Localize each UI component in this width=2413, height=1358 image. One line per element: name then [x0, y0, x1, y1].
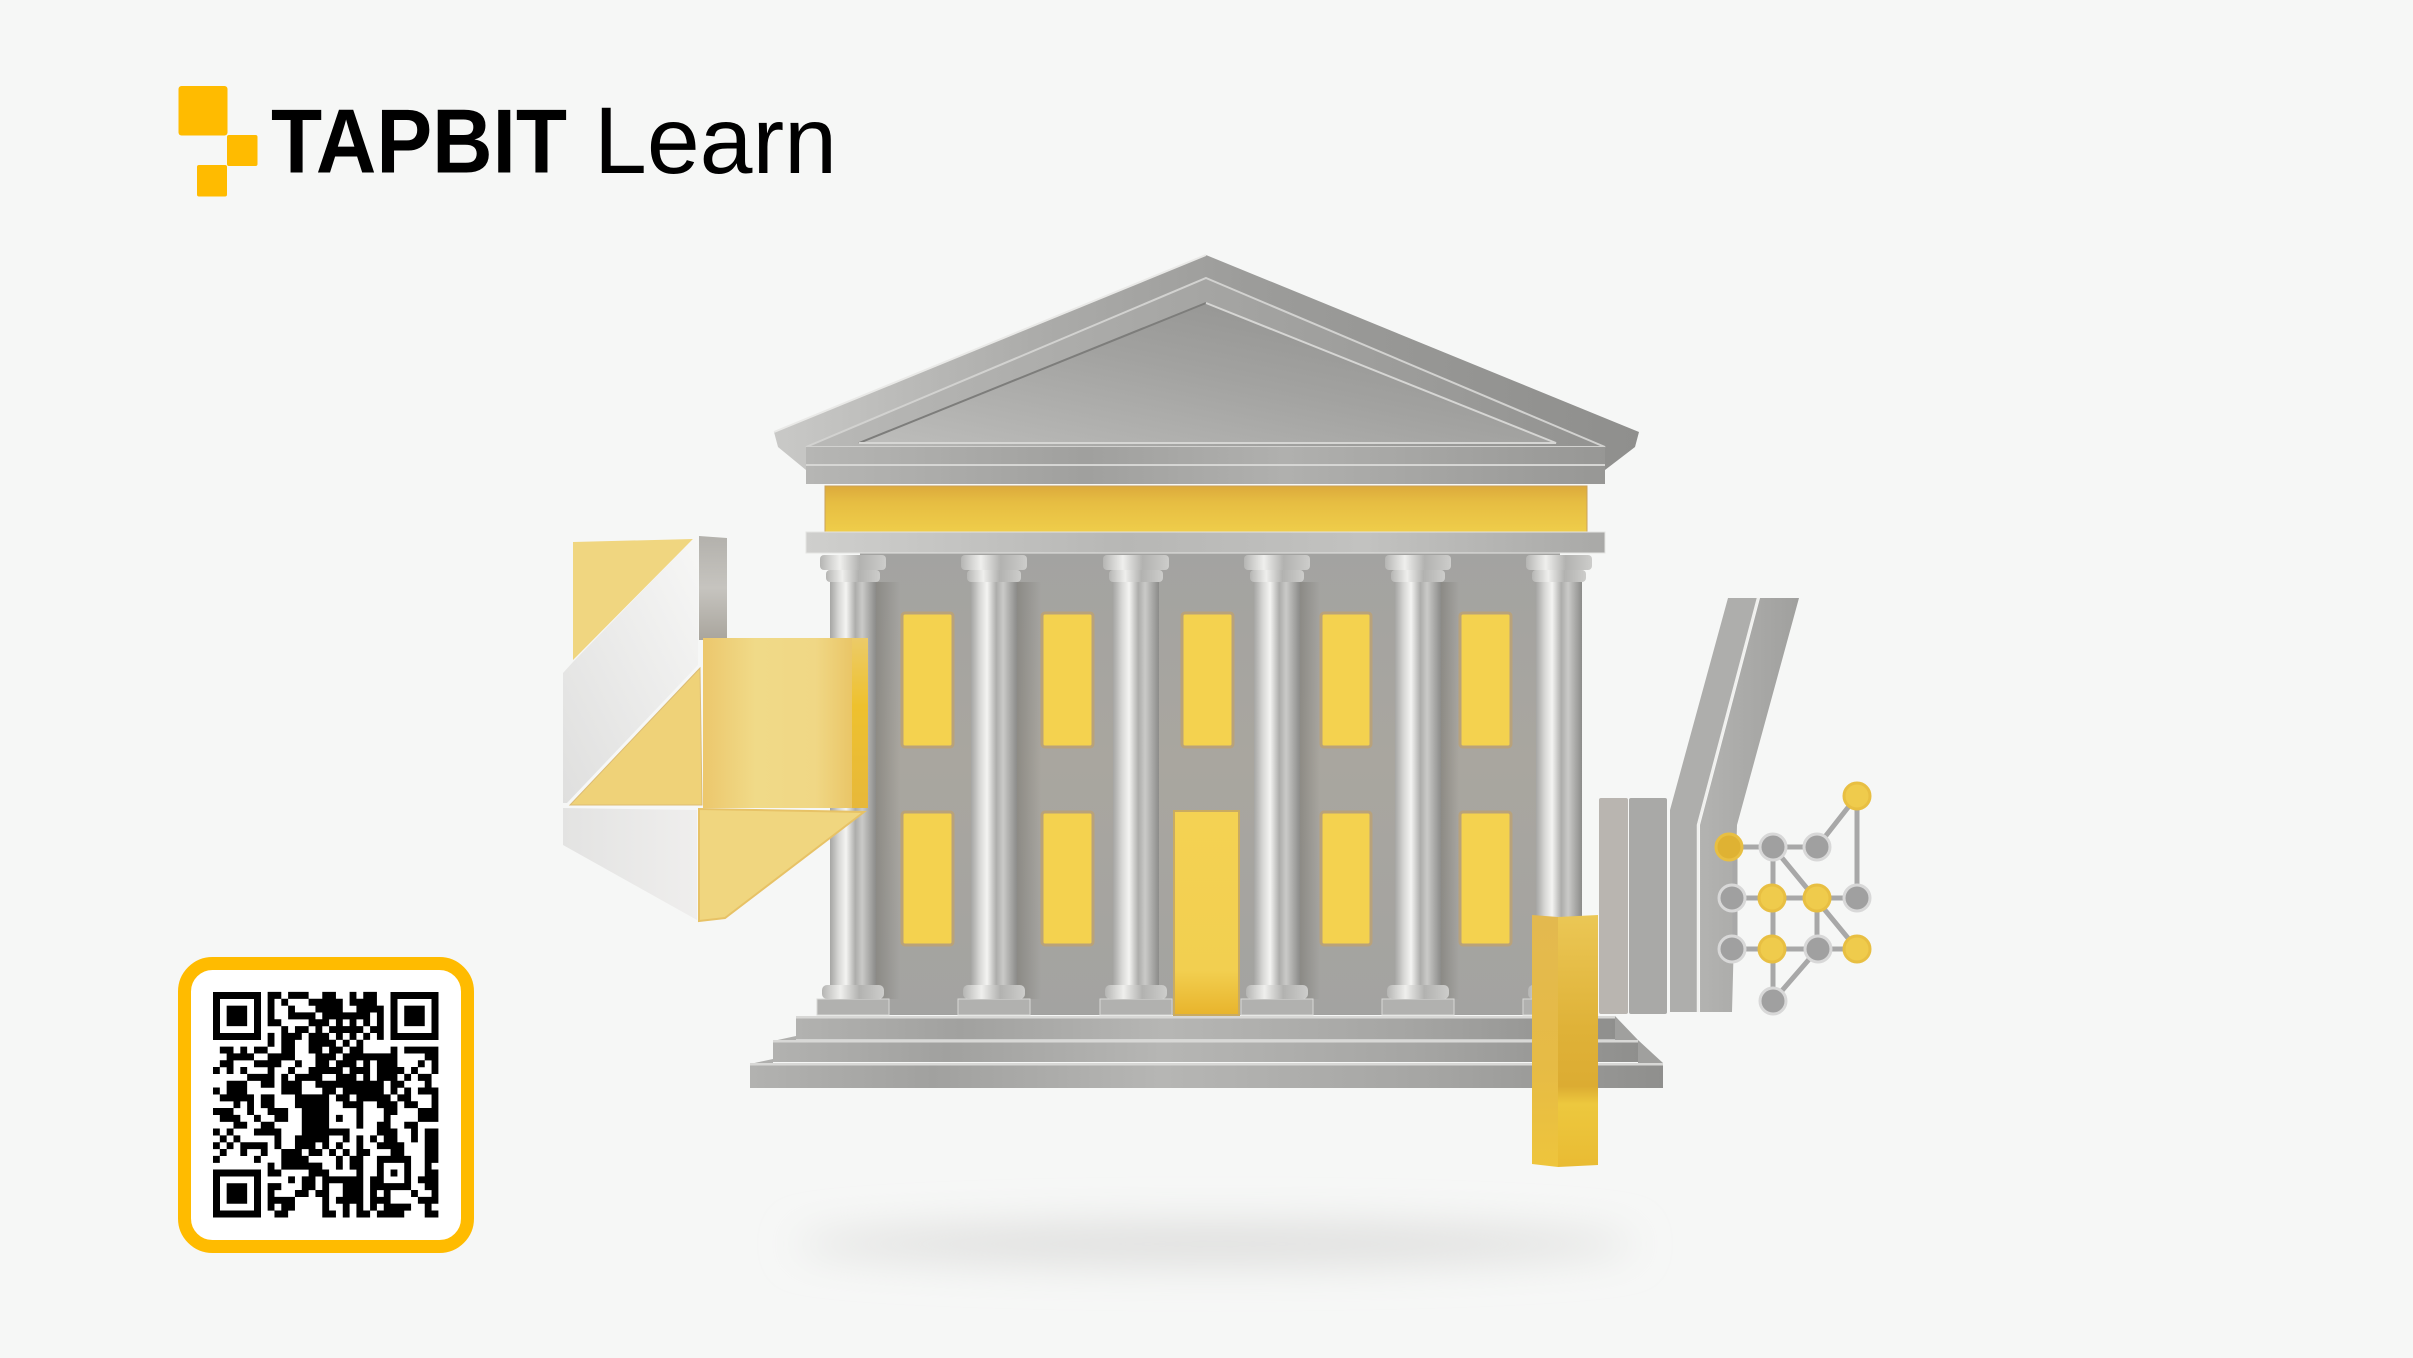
- connecting lines: [1729, 796, 1857, 1001]
- QR code card: [184, 964, 468, 1246]
- gold pillar in front: [1532, 915, 1598, 1167]
- block right face: [1629, 798, 1667, 1014]
- metal edge: [699, 536, 727, 640]
- bottom gold wedge: [699, 809, 864, 921]
- pillar left face: [1532, 915, 1558, 1167]
- pillar right face: [1558, 915, 1598, 1167]
- middle gold triangle: [570, 668, 702, 805]
- bottom white metal wedge: [563, 808, 697, 920]
- bent plate right face: [1700, 598, 1799, 1012]
- logo mark: three yellow squares: [178, 86, 258, 196]
- QR matrix: [213, 992, 438, 1217]
- wordmark TAPBIT: TAPBIT: [271, 92, 567, 192]
- white metal parallelogram: [563, 538, 698, 803]
- gold cube side: [852, 638, 868, 808]
- central door: [1174, 811, 1239, 1015]
- lower cornice: [806, 532, 1605, 553]
- network node diagram: [1716, 783, 1870, 1014]
- bent plate highlight: [1698, 598, 1758, 1012]
- column cast shadows on the wall: [876, 582, 1459, 999]
- wordmark Learn: Learn: [594, 88, 837, 194]
- block left face: [1599, 798, 1628, 1014]
- geometric glass and metal block, left: [563, 536, 868, 921]
- lower windows: [902, 812, 1511, 945]
- ground shadow: [795, 1224, 1635, 1264]
- gold frieze: [825, 486, 1587, 532]
- bank building: [750, 255, 1663, 1088]
- logo: TAPBIT Learn: [178, 86, 837, 196]
- gold nodes: [1716, 783, 1870, 962]
- stepped base: [750, 1016, 1663, 1088]
- gold cube face: [703, 638, 853, 808]
- back wall: [860, 553, 1560, 1015]
- columns: [817, 555, 1595, 1015]
- windows and door: [902, 613, 1511, 1015]
- grey nodes: [1719, 834, 1870, 1014]
- bent plate left face: [1670, 598, 1757, 1012]
- upper windows: [902, 613, 1511, 747]
- top gold triangle: [573, 539, 693, 660]
- upright grey slabs, right: [1599, 598, 1799, 1014]
- card frame: [184, 964, 468, 1246]
- pediment roof: [774, 255, 1639, 484]
